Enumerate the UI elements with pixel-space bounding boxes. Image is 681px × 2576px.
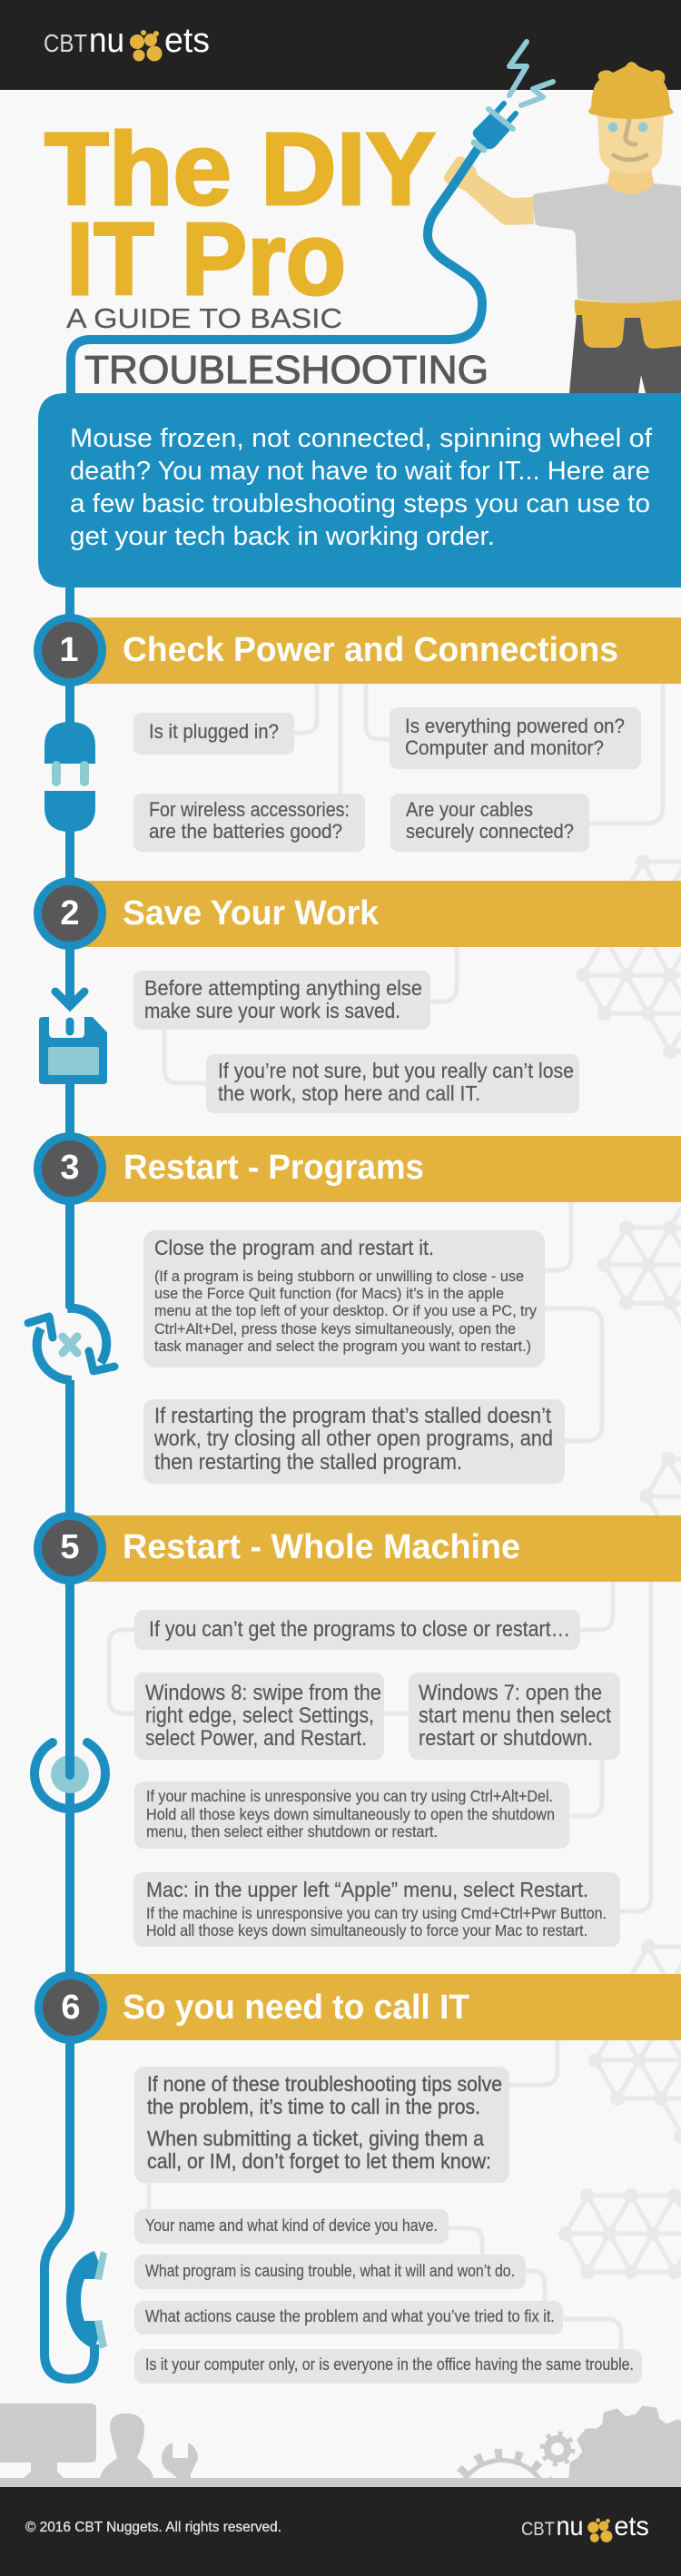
box: is it plugged in [133,713,294,755]
box: name and device: Your name and what kind of device you have. [145,2216,438,2235]
title: The DIY IT Pro [44,112,436,316]
box: wireless accessories: For wireless accessories: [149,798,350,821]
box: call in the pros [134,2067,509,2183]
section 5 heading: Restart - Whole Machine [123,1528,520,1566]
box: is it plugged in: Is it plugged in? [149,720,279,743]
box: what program [134,2255,526,2289]
logo: CBT Nuggets: ets [164,22,210,60]
section 2 heading: 2 [60,894,80,933]
box: cables connected [390,794,589,852]
box: wireless accessories [133,794,365,852]
footer bar [0,2487,681,2576]
box: call IT if unsure: the work, stop here and call IT. [218,1081,480,1105]
box: unresponsive machine [134,1781,569,1849]
panel: intro: death? You may not have to wait for IT... Here are [70,457,650,486]
box: close the program [143,1230,545,1367]
box: computer or office [134,2349,642,2384]
connector lines between boxes [109,681,663,2349]
box: name and device [134,2209,449,2244]
footer logo: ets [614,2512,649,2541]
section 2 heading [38,881,681,947]
box: windows 7: start menu then select [419,1703,611,1728]
logo: CBT Nuggets: CBT [44,29,87,57]
box: call in the pros: the problem, it’s time to call in the pros. [147,2095,480,2118]
box: windows 7 [409,1673,620,1760]
box: can't close programs [134,1610,580,1650]
box: computer or office: Is it your computer only, or is everyone in the office having the same trouble. [145,2355,634,2374]
box: what actions: What actions cause the problem and what you’ve tried to fix it. [145,2307,555,2325]
title: The DIY IT Pro: IT Pro [66,202,346,316]
title: The DIY IT Pro: The DIY [44,112,436,226]
top header bar [0,0,681,90]
box: call in the pros: call, or IM, don’t forget to let them know: [147,2149,491,2173]
section 1 heading [38,617,681,684]
logo: CBT Nuggets: nu [89,22,124,60]
box: windows 7: Windows 7: open the [419,1681,602,1705]
box: windows 8: Windows 8: swipe from the [145,1681,381,1705]
footer copyright: © 2016 CBT Nuggets. All rights reserved. [25,2520,281,2535]
footer logo: CBT [521,2517,555,2540]
section 5 heading [38,1515,681,1582]
box: unresponsive machine: menu, then select either shutdown or restart. [146,1822,438,1841]
box: close the program: menu at the top left of your desktop. Or if you use a PC, try [154,1302,537,1319]
box: cables connected: securely connected? [406,820,574,843]
blue cable from plug through timeline [71,149,482,400]
box: wireless accessories: are the batteries good? [149,820,342,843]
box: can't close programs: If you can’t get the programs to close or restart… [149,1617,570,1642]
box: closing other programs: If restarting the program that’s stalled doesn’t [154,1404,551,1428]
box: call in the pros: When submitting a ticket, giving them a [147,2127,484,2150]
box: what actions [134,2301,563,2334]
section 6 heading [38,1974,681,2040]
box: cables connected: Are your cables [406,798,533,821]
box: unresponsive machine: If your machine is unresponsive you can try using Ctrl+Alt+Del. [146,1787,553,1805]
box: mac restart: Hold all those keys down simultaneously to force your Mac to restart. [146,1921,587,1939]
box: close the program: Ctrl+Alt+Del, press those keys simultaneously, open the [154,1320,516,1337]
section 3 heading: Restart - Programs [123,1149,424,1187]
subtitle: a guide to basic: A GUIDE TO BASIC [66,302,342,334]
section 6 heading: So you need to call IT [123,1989,469,2027]
panel: intro: a few basic troubleshooting steps you can use to [70,489,650,518]
icon: restart arrows [28,1308,114,1380]
section 3 heading: 3 [60,1149,80,1187]
box: close the program: (If a program is being stubborn or unwilling to close - use [154,1268,524,1285]
section 2 heading: Save Your Work [123,894,380,933]
box: call in the pros: If none of these troubleshooting tips solve [147,2072,502,2096]
box: close the program: use the Force Quit function (for Macs) it’s in the apple [154,1285,504,1302]
box: call IT if unsure [206,1054,579,1113]
box: close the program: task manager and select the program you want to restart.) [154,1337,531,1355]
box: windows 8: right edge, select Settings, [145,1703,374,1728]
background mesh pattern [558,854,681,2279]
box: windows 8 [134,1673,384,1760]
box: mac restart: If the machine is unresponsive you can try using Cmd+Ctrl+Pwr Button. [146,1904,607,1922]
section 5 heading: 5 [60,1528,80,1566]
panel: intro [38,393,681,587]
timeline line [44,581,94,2379]
box: unresponsive machine: Hold all those keys down simultaneously to open the shutdown [146,1805,555,1823]
box: closing other programs: then restarting the stalled program. [154,1450,462,1475]
section 3 heading [38,1136,681,1202]
icon: power button [35,1582,105,1809]
box: mac restart: Mac: in the upper left “Apple” menu, select Restart. [146,1878,588,1901]
box: save your work: make sure your work is saved. [144,999,400,1022]
box: what program: What program is causing trouble, what it will and won’t do. [145,2262,515,2280]
box: windows 7: restart or shutdown. [419,1726,593,1751]
box: save your work [133,971,430,1030]
box: is everything powered on: Computer and monitor? [405,736,604,759]
icon: unplugged plug [44,722,95,832]
box: closing other programs [143,1399,565,1484]
box: close the program: Close the program and restart it. [154,1236,434,1259]
section 1 heading: Check Power and Connections [123,631,618,669]
footer logo: nu [556,2512,583,2541]
box: save your work: Before attempting anything else [144,976,422,1000]
box: windows 8: select Power, and Restart. [145,1726,367,1751]
panel: intro: Mouse frozen, not connected, spinning wheel of [70,424,653,453]
panel: intro: get your tech back in working order. [70,522,495,551]
box: is everything powered on [390,707,641,769]
box: call IT if unsure: If you’re not sure, but you really can’t lose [218,1059,574,1082]
footer silhouettes: monitor, person, wrench, gears [0,2403,681,2561]
section 1 heading: 1 [59,631,79,669]
box: mac restart [133,1872,620,1947]
icon: arrow into floppy disk [39,992,107,1084]
section 6 heading: 6 [61,1989,81,2027]
illustration: worker holding plug [444,42,681,393]
icon: telephone handset [66,2251,107,2349]
footer logo [521,2512,649,2542]
logo: CBT Nuggets [44,22,210,62]
box: closing other programs: work, try closing all other open programs, and [153,1426,553,1451]
box: is everything powered on: Is everything powered on? [405,715,625,737]
subtitle: troubleshooting: TROUBLESHOOTING [84,348,489,392]
